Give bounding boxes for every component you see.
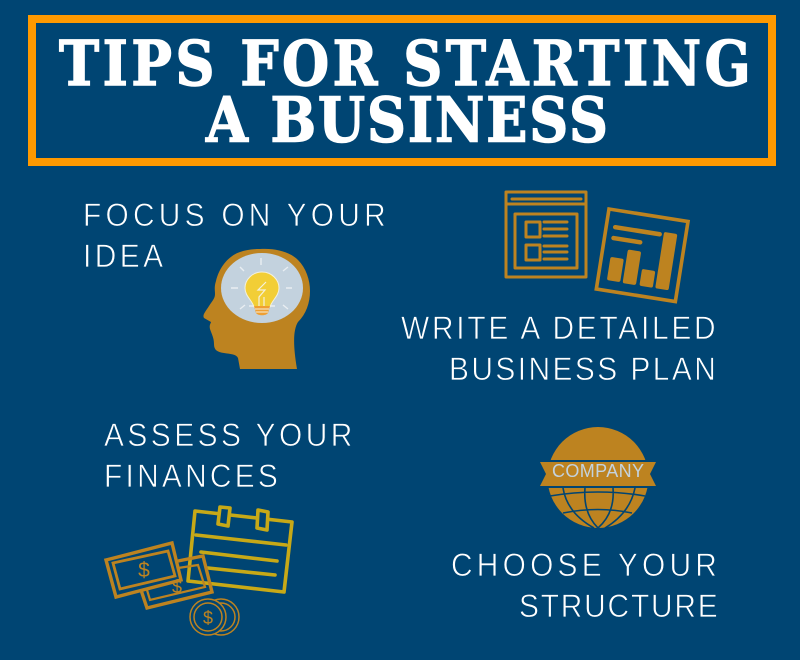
heading: choose your structure <box>451 547 718 624</box>
icon: company globe <box>535 427 661 528</box>
title <box>59 26 751 156</box>
icon: coins <box>190 599 239 635</box>
icon: bar chart report <box>596 209 688 302</box>
icon: coins: $ <box>203 608 213 628</box>
heading: write a detailed business plan: BUSINESS PLAN <box>449 351 716 387</box>
heading: focus on your idea: FOCUS ON YOUR <box>83 197 386 233</box>
heading: focus on your idea <box>83 197 386 274</box>
icon: money bills: $ <box>172 577 182 597</box>
heading: write a detailed business plan: WRITE A DETAILED <box>401 310 716 346</box>
heading: assess your finances <box>104 417 352 494</box>
title box <box>32 19 772 162</box>
company banner: COMPANY <box>552 461 644 481</box>
icon: money bills: $ <box>138 559 150 582</box>
title: TIPS FOR STARTING <box>59 26 751 100</box>
title: A BUSINESS <box>205 83 608 156</box>
heading: choose your structure: CHOOSE YOUR <box>451 547 717 583</box>
heading: choose your structure: STRUCTURE <box>519 588 718 624</box>
icon: head with light bulb <box>203 249 310 369</box>
icon: calendar <box>188 507 292 592</box>
heading: assess your finances: ASSESS YOUR <box>104 417 352 453</box>
heading: focus on your idea: IDEA <box>83 238 163 274</box>
heading: write a detailed business plan <box>401 310 716 387</box>
icon: business plan document <box>506 192 586 277</box>
heading: assess your finances: FINANCES <box>104 458 278 494</box>
icon: money bills <box>106 543 212 608</box>
